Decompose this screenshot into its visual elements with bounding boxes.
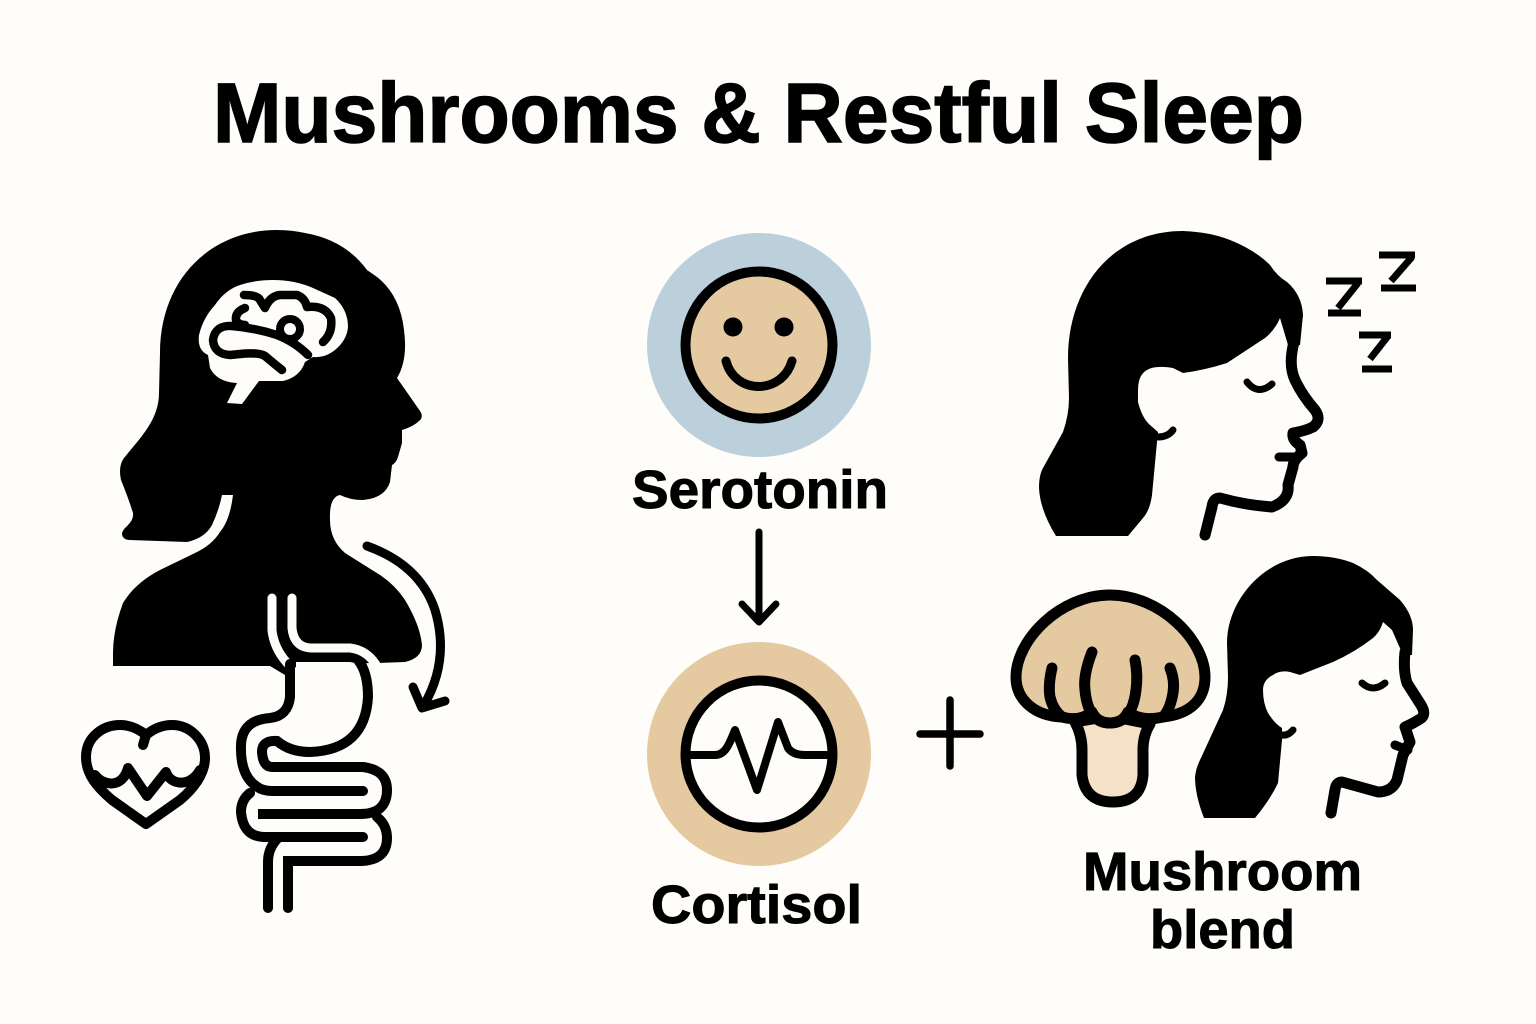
silhouette: hair: [1039, 231, 1303, 536]
silhouette: hair: [1195, 556, 1413, 818]
icon: pulse circle: [647, 642, 871, 866]
label: Serotonin: Serotonin: [632, 460, 888, 520]
panel: head silhouette with brain and gut: [86, 230, 445, 908]
silhouette: head and shoulders: [113, 230, 422, 675]
icon: plus sign: [920, 700, 980, 766]
icon: heart with pulse: [86, 725, 205, 824]
label: Mushroom blend: Mushroom: [1083, 842, 1362, 902]
icon: sleep Z letters: [1326, 255, 1416, 369]
icon: digestive tract: [241, 598, 387, 908]
label: Mushroom blend: [1083, 842, 1362, 960]
label: Mushroom blend: blend: [1150, 900, 1295, 960]
icon: mushroom: [1016, 595, 1205, 802]
panel: cortisol: [647, 642, 871, 935]
arrow: curved downward: [367, 546, 445, 708]
title: Mushrooms & Restful Sleep: [213, 66, 1304, 160]
icon: brain: [199, 280, 348, 404]
face profile: [1282, 652, 1424, 813]
label: Cortisol: Cortisol: [651, 875, 862, 935]
face profile: [1158, 342, 1318, 535]
panel: sleeping head: [1039, 231, 1416, 536]
arrow: serotonin to cortisol: [742, 532, 776, 622]
icon: smiling face: [647, 233, 871, 457]
panel: mushroom blend: [1016, 556, 1424, 960]
panel: serotonin: [632, 233, 888, 520]
